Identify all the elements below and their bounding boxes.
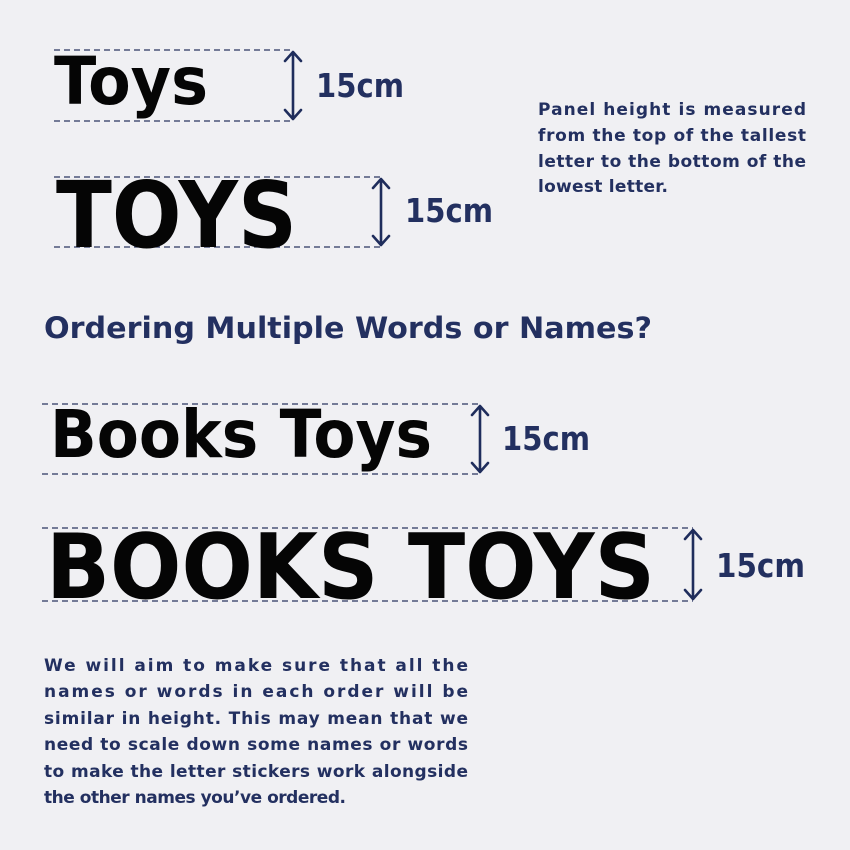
label: 15cm: 15cm	[405, 191, 493, 230]
example: TOYS	[54, 162, 493, 269]
text: scaling note	[44, 656, 468, 808]
example: TOYS: TOYS	[56, 162, 297, 269]
arrow: Toys height	[285, 52, 301, 119]
heading: Ordering Multiple Words or Names?	[44, 311, 652, 345]
arrow: Books Toys height	[472, 406, 488, 472]
label: 15cm: 15cm	[316, 66, 404, 105]
text: scaling note: to make the letter stickers work alongside	[44, 762, 468, 782]
example: Books Toys: Books Toys	[50, 396, 432, 473]
label: 15cm: 15cm	[502, 419, 590, 458]
arrow: TOYS height	[373, 179, 389, 245]
example: Toys	[54, 43, 404, 121]
text: scaling note: the other names you’ve ordered.	[44, 788, 346, 808]
text: scaling note: We will aim to make sure that all the	[44, 656, 468, 676]
arrow: BOOKS TOYS height	[685, 530, 701, 599]
example: Toys: Toys	[54, 43, 208, 120]
label: 15cm: 15cm	[716, 546, 805, 585]
example: BOOKS TOYS: BOOKS TOYS	[46, 515, 655, 620]
text: panel height note: from the top of the tallest	[538, 126, 806, 146]
text: panel height note	[538, 100, 806, 197]
text: scaling note: similar in height. This may mean that we	[44, 709, 468, 729]
text: panel height note: Panel height is measured	[538, 100, 806, 120]
text: scaling note: names or words in each order will be	[44, 682, 468, 702]
text: panel height note: letter to the bottom of the	[538, 152, 806, 172]
text: scaling note: need to scale down some names or words	[44, 735, 468, 755]
text: panel height note: lowest letter.	[538, 177, 668, 197]
